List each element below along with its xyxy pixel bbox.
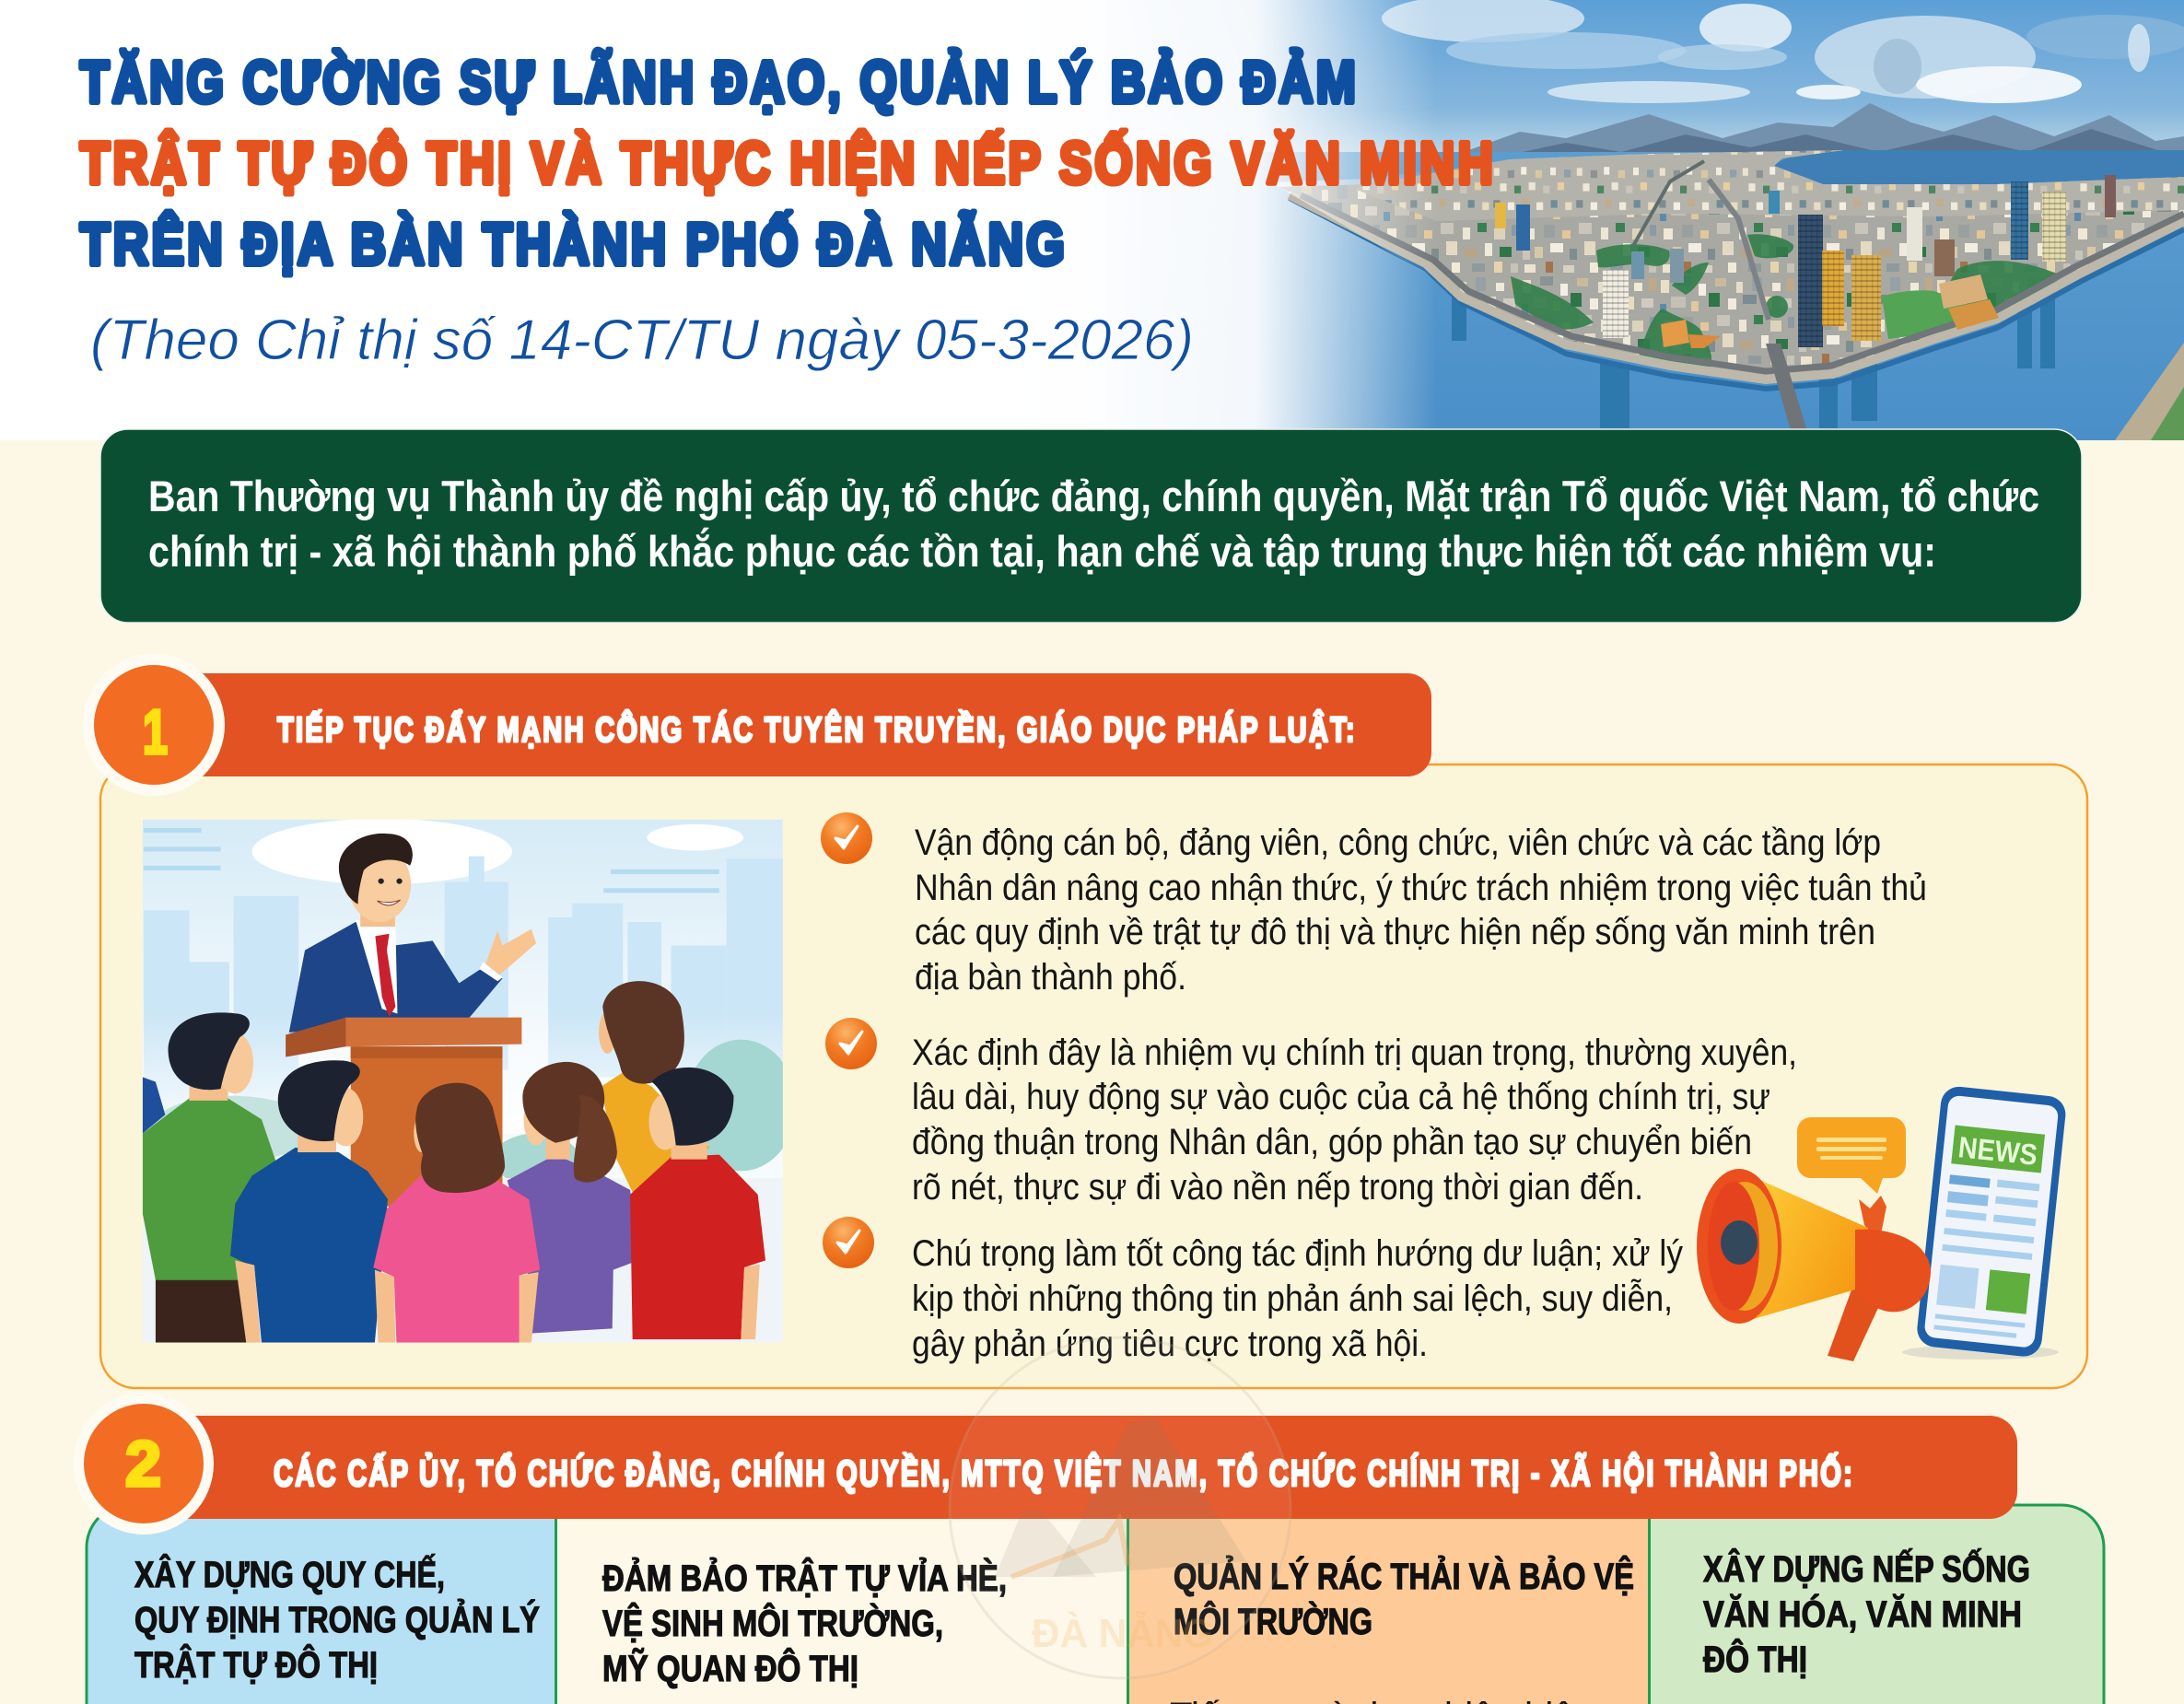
city tip fade	[1277, 172, 1428, 274]
bay	[1774, 150, 2184, 184]
woman in pink	[373, 1083, 540, 1343]
column 4 background	[1649, 1505, 2105, 1704]
towers	[1798, 215, 1823, 347]
header 1 text: TIẾP TỤC ĐẨY MẠNH CÔNG TÁC TUYÊN TRUYỀN, GIÁO DỤC PHÁP LUẬT:	[277, 708, 1357, 750]
back woman in yellow	[599, 981, 709, 1192]
number badge 2	[74, 1393, 214, 1535]
bridge pier reflections	[1600, 364, 1629, 428]
number badge 1	[83, 654, 225, 796]
watermark text: ĐÀ NẴNG	[1032, 1610, 1213, 1656]
main bridge	[1766, 344, 1807, 429]
intro text line 2: chính trị - xã hội thành phố khắc phục các tồn tại, hạn chế và tập trung thực hiện tốt các nhiệm vụ:	[148, 527, 1936, 576]
bullet 2 text: rõ nét, thực sự đi vào nền nếp trong thời gian đến.	[912, 1167, 1643, 1208]
icon: check mark 3	[823, 1217, 874, 1268]
column 4 heading: XÂY DỰNG NẾP SỐNG	[1703, 1547, 2030, 1590]
bullet 2 text: đồng thuận trong Nhân dân, góp phần tạo sự chuyển biến	[912, 1122, 1752, 1162]
column 2 heading	[602, 1557, 1007, 1689]
column 2 heading: VỆ SINH MÔI TRƯỜNG,	[602, 1602, 943, 1644]
title line 1: TĂNG CƯỜNG SỰ LÃNH ĐẠO, QUẢN LÝ BẢO ĐẢM	[80, 48, 1359, 115]
white header band	[0, 0, 2184, 440]
bullet 3 text: gây phản ứng tiêu cực trong xã hội.	[912, 1324, 1428, 1364]
panel: section 1 content	[100, 764, 2087, 1388]
column 4 heading	[1703, 1547, 2030, 1680]
subtitle: (Theo Chỉ thị số 14-CT/TU ngày 05-3-2026)	[90, 309, 1194, 372]
bullet 2 text: Xác định đây là nhiệm vụ chính trị quan trọng, thường xuyên,	[912, 1033, 1797, 1073]
bullet 3 text: Chú trọng làm tốt công tác định hướng dư luận; xử lý	[912, 1233, 1683, 1274]
bullet 1 text	[915, 823, 1927, 998]
bullet 1 text: Vận động cán bộ, đảng viên, công chức, viên chức và các tầng lớp	[915, 823, 1881, 863]
column 1 heading: XÂY DỰNG QUY CHẾ,	[134, 1553, 445, 1595]
column 2 heading: ĐẢM BẢO TRẬT TỰ VỈA HÈ,	[602, 1557, 1007, 1599]
column 3 heading: QUẢN LÝ RÁC THẢI VÀ BẢO VỆ	[1174, 1555, 1634, 1597]
bullet 2 text	[912, 1033, 1797, 1208]
bullet 1 text: Nhân dân nâng cao nhận thức, ý thức trách nhiệm trong việc tuân thủ	[915, 868, 1927, 908]
column 1 heading	[134, 1553, 540, 1686]
man in green	[143, 1012, 276, 1343]
column 3 heading: MÔI TRƯỜNG	[1174, 1600, 1372, 1642]
illustration: speaker at podium addressing people	[143, 819, 796, 1343]
icon: phone with news: NEWS	[1956, 1130, 2039, 1172]
bullet 2 text: lâu dài, huy động sự vào cuộc của cả hệ thống chính trị, sự	[912, 1077, 1770, 1117]
bullet 2	[825, 1018, 1797, 1208]
column 1 heading: TRẬT TỰ ĐÔ THỊ	[134, 1643, 378, 1686]
column 4 heading: VĂN HÓA, VĂN MINH	[1703, 1593, 2022, 1635]
column 4 heading: ĐÔ THỊ	[1703, 1638, 1807, 1680]
bullet 1 text: địa bàn thành phố.	[915, 957, 1186, 998]
section 1 header	[83, 654, 1431, 796]
header city illustration	[1172, 0, 2184, 440]
mountains	[1470, 103, 2184, 152]
icon: speech bubble	[1797, 1117, 1906, 1194]
intro green box	[100, 429, 2082, 623]
bullet 1	[821, 812, 1927, 998]
speaker	[289, 834, 536, 1033]
city land mass	[1290, 198, 2184, 389]
panel: section 2 columns	[87, 1505, 2105, 1704]
promenade	[1290, 195, 2184, 379]
column 2 heading: MỸ QUAN ĐÔ THỊ	[602, 1647, 858, 1689]
land at lower right	[2115, 343, 2184, 440]
green spaces	[1511, 234, 2063, 367]
number badge 1: 1	[143, 697, 168, 767]
section 2 header	[74, 1393, 2017, 1535]
icon: phone with news	[1902, 1085, 2067, 1360]
icon: megaphone	[1697, 1169, 1931, 1361]
header bar	[175, 1416, 2017, 1519]
watermark: Da Nang emblem	[950, 1337, 1291, 1678]
fade to white	[1105, 0, 1428, 429]
bullet 3 text	[912, 1233, 1683, 1364]
bullet 3 text: kịp thời những thông tin phản ánh sai lệch, suy diễn,	[912, 1278, 1673, 1319]
podium	[286, 1018, 521, 1207]
number badge 2: 2	[125, 1428, 161, 1500]
roads	[1633, 161, 1704, 246]
column 2 background	[555, 1505, 1127, 1704]
man in red	[630, 1068, 765, 1339]
title line 2: TRẬT TỰ ĐÔ THỊ VÀ THỰC HIỆN NẾP SỐNG VĂN MINH	[80, 129, 1496, 196]
column 1 heading: QUY ĐỊNH TRONG QUẢN LÝ	[134, 1598, 540, 1640]
column 3 background	[1127, 1505, 1649, 1704]
woman in purple	[508, 1062, 638, 1333]
man in blue	[230, 1060, 388, 1343]
title	[80, 48, 1496, 277]
icon: check mark 2	[825, 1018, 877, 1069]
bullet 1 text: các quy định về trật tự đô thị và thực hiện nếp sống văn minh trên	[915, 912, 1875, 952]
header bar	[184, 673, 1431, 776]
bullet 3	[823, 1217, 1683, 1364]
icon: check mark 1	[821, 812, 872, 864]
title line 3: TRÊN ĐỊA BÀN THÀNH PHỐ ĐÀ NẴNG	[80, 210, 1068, 277]
river	[1256, 152, 2184, 440]
column 3 heading	[1174, 1555, 1634, 1642]
column 1 background	[87, 1505, 555, 1704]
